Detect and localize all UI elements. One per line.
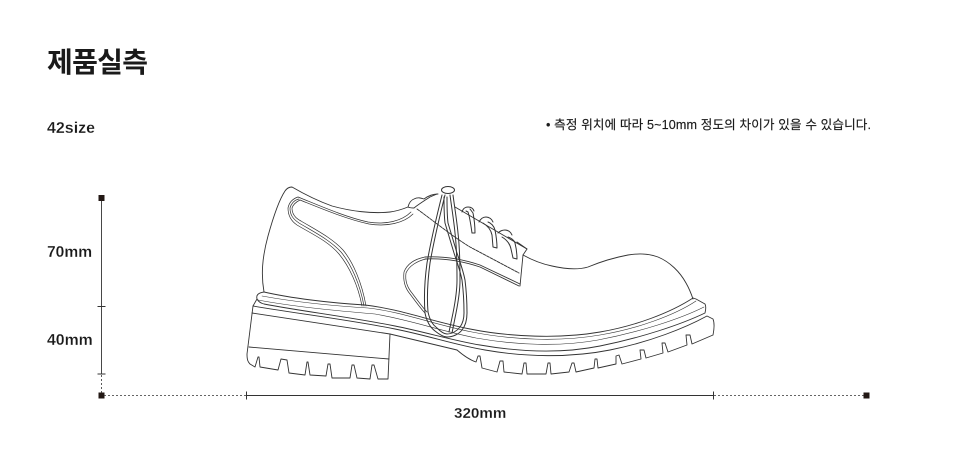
title: 제품실측	[47, 41, 148, 81]
width label: 320mm: 320mm	[454, 405, 506, 422]
welt	[257, 292, 706, 351]
horizontal dimension line	[104, 392, 870, 400]
heel and outsole	[247, 299, 714, 379]
height label: 40mm: 40mm	[47, 332, 93, 349]
shoelace loops	[424, 186, 467, 337]
shoe line drawing	[247, 186, 714, 379]
shoe upper	[262, 187, 693, 313]
vertical dimension line	[98, 195, 106, 398]
size label: 42size	[47, 120, 95, 137]
measurement note: • 측정 위치에 따라 5~10mm 정도의 차이가 있을 수 있습니다.	[546, 118, 871, 132]
height label: 70mm: 70mm	[47, 244, 92, 261]
collar and heel stitching	[288, 197, 413, 306]
eyelets	[462, 207, 527, 259]
